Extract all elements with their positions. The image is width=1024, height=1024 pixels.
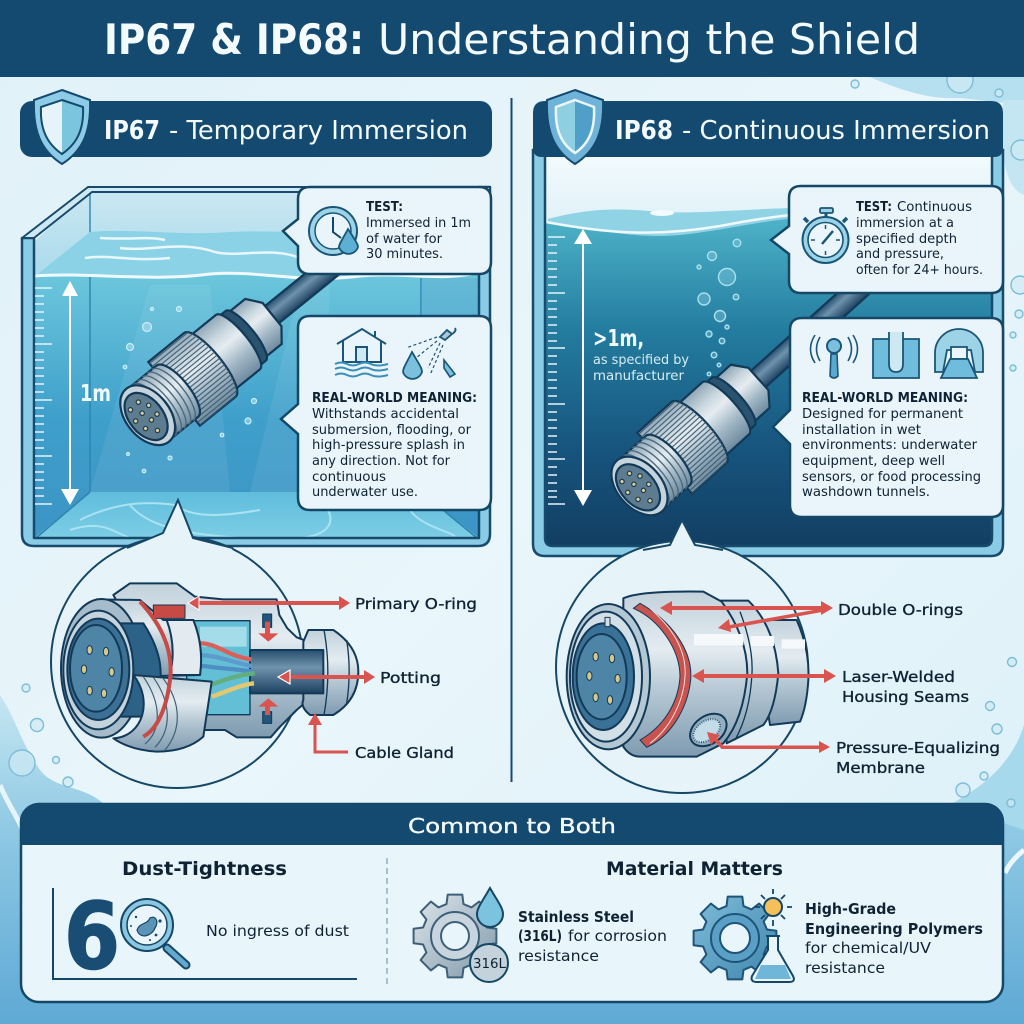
callout: IP68 real-world meaning	[773, 318, 1003, 517]
panel: IP67 header: - Temporary Immersion	[169, 116, 468, 146]
test text: Continuous	[897, 200, 972, 215]
test text	[366, 200, 471, 262]
icon: stopwatch	[802, 208, 848, 263]
depth label: 1m: 1m	[80, 381, 111, 407]
tank air zone	[545, 157, 992, 227]
test text: specified depth	[856, 232, 957, 247]
dust rating chart: 6	[64, 883, 120, 990]
meaning text: installation in wet	[802, 423, 921, 438]
tank frame	[533, 150, 1003, 556]
meaning text: high-pressure splash in	[312, 438, 465, 453]
title banner: IP67 & IP68:	[104, 15, 364, 64]
text: engineering polymers: Engineering Polymers	[805, 921, 983, 938]
cutaway connector illustration	[61, 583, 358, 752]
connector photo: IP67	[105, 224, 371, 461]
test text: TEST:	[856, 200, 892, 215]
test text: TEST:	[366, 200, 403, 215]
icon: IP68 shield	[547, 90, 603, 164]
heading: dust-tightness: Dust-Tightness	[122, 858, 287, 880]
meaning text: environments: underwater	[802, 438, 977, 453]
icon: clock with drop	[309, 207, 358, 255]
closeup connector illustration	[567, 592, 809, 757]
callout: IP67 real-world meaning	[281, 316, 491, 510]
icon: washdown tunnel	[935, 329, 983, 378]
panel: IP68 continuous immersion tank	[533, 150, 1003, 556]
panel: IP68 header: IP68	[615, 116, 673, 146]
text: stainless steel: (316L)	[518, 928, 562, 945]
title banner: Understanding the Shield	[378, 15, 920, 64]
labels: IP68 connector	[836, 601, 1000, 777]
meaning text	[312, 391, 477, 500]
test text: often for 24+ hours.	[856, 263, 983, 278]
text: stainless steel: Stainless Steel	[518, 909, 634, 926]
labels: IP68 connector: Laser-Welded	[842, 668, 955, 686]
panel: common to both	[21, 804, 1003, 1002]
meaning text: continuous	[312, 470, 386, 485]
icon: magnifier with dust	[121, 899, 186, 965]
heading: material matters: Material Matters	[606, 858, 783, 880]
meaning text: equipment, deep well	[802, 454, 945, 469]
meaning text: underwater use.	[312, 485, 418, 500]
test text: 30 minutes.	[366, 247, 443, 262]
meaning text: Designed for permanent	[802, 407, 963, 422]
panel: IP67 header	[20, 90, 492, 164]
labels: IP68 connector: Pressure-Equalizing	[836, 739, 1000, 757]
depth label: greater than 1m: manufacturer	[593, 369, 684, 384]
meaning text: submersion, flooding, or	[312, 423, 471, 438]
depth label: greater than 1m	[593, 326, 689, 384]
meaning text: washdown tunnels.	[802, 485, 930, 500]
water surface	[34, 230, 480, 279]
labels: IP68 connector: Housing Seams	[842, 688, 969, 706]
tank water body	[34, 274, 479, 539]
icon: IP67 shield	[34, 90, 90, 164]
tank water body	[545, 215, 992, 546]
water surface	[548, 208, 800, 236]
labels: IP67 cutaway: Primary O-ring	[355, 595, 477, 613]
tank back wall	[34, 189, 480, 290]
depth scale ticks	[35, 288, 52, 504]
depth scale ticks	[548, 237, 565, 504]
labels: IP67 cutaway	[355, 595, 477, 762]
tank frame	[22, 187, 490, 546]
labels: IP67 cutaway: Cable Gland	[355, 744, 454, 762]
test text: of water for	[366, 232, 442, 247]
meaning text: REAL-WORLD MEANING:	[312, 391, 477, 406]
panel: IP67 header: IP67	[104, 116, 160, 146]
center divider	[510, 98, 512, 782]
text: stainless steel: resistance	[518, 948, 599, 965]
text: engineering polymers: for chemical/UV	[805, 940, 931, 957]
decorative bubbles and droplets	[9, 67, 1024, 807]
meaning text: sensors, or food processing	[802, 470, 981, 485]
panel: common to both: Common to Both	[408, 814, 616, 838]
callout arrows: IP67	[188, 596, 375, 754]
meaning text: REAL-WORLD MEANING:	[802, 391, 968, 406]
icon: steel gear with drop and 316L badge	[414, 888, 508, 982]
title banner	[0, 0, 1024, 77]
panel: IP68 header	[533, 90, 1003, 164]
icon: steel gear with drop and 316L badge: 316L	[473, 957, 507, 972]
test text: and pressure,	[856, 247, 944, 262]
text: engineering polymers: resistance	[805, 960, 885, 977]
bubbles in water	[697, 239, 741, 376]
callout: IP68 test	[771, 186, 1003, 293]
meaning text: any direction. Not for	[312, 454, 450, 469]
connector photo: IP68	[596, 245, 900, 531]
tank floor with caustics	[34, 492, 479, 538]
detail circle: IP68 connector	[556, 520, 809, 793]
labels: IP67 cutaway: Potting	[380, 669, 441, 687]
icon: flooded house	[335, 329, 388, 376]
panel: IP67 temporary immersion tank	[22, 187, 491, 546]
callout: IP67 test	[283, 187, 491, 274]
test text: Immersed in 1m	[366, 216, 471, 231]
text: engineering polymers	[805, 901, 983, 977]
text: engineering polymers: High-Grade	[805, 901, 896, 918]
depth arrow	[574, 229, 592, 506]
meaning text: Withstands accidental	[312, 407, 459, 422]
dust rating chart: No ingress of dust	[206, 922, 349, 940]
depth label: greater than 1m: as specified by	[593, 353, 689, 368]
text: stainless steel	[518, 909, 667, 965]
labels: IP68 connector: Membrane	[836, 759, 925, 777]
meaning text	[802, 391, 981, 500]
icon: polymer gear with sun and flask	[694, 889, 794, 982]
dust rating chart	[53, 883, 357, 990]
callout arrows: IP68	[660, 601, 836, 753]
text: stainless steel: for corrosion	[568, 928, 667, 945]
labels: IP68 connector: Double O-rings	[838, 601, 963, 619]
panel: IP68 header: - Continuous Immersion	[682, 116, 990, 146]
test text: immersion at a	[856, 216, 954, 231]
icon: wireless sensor	[810, 335, 858, 378]
depth label: greater than 1m: >1m,	[593, 326, 644, 352]
depth arrow	[61, 281, 79, 505]
icon: deep well sensor	[873, 332, 919, 378]
icon: water drop and spray	[403, 328, 456, 379]
detail circle: IP67 cutaway	[51, 500, 358, 788]
test text	[856, 200, 983, 278]
bubbles in water	[123, 306, 256, 473]
